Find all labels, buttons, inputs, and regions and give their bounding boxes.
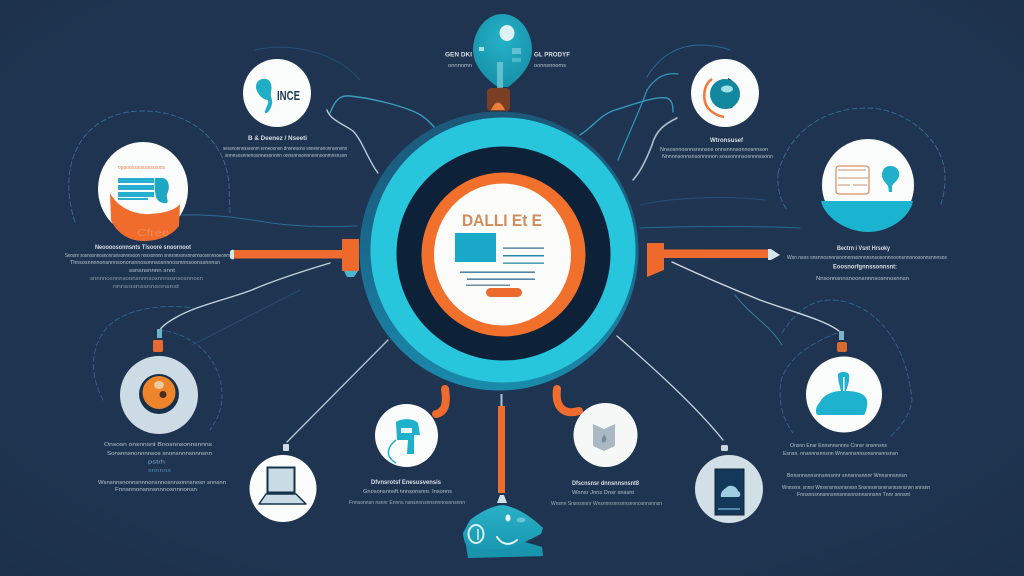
- node: lower center right: [551, 403, 662, 507]
- node text: pstrh: [148, 460, 165, 466]
- node text: Fnnsonnsn nsnnr Ennns nsnsnnnsnnsnnnosnnsnnn: [349, 500, 465, 506]
- node text: snnnns: [148, 468, 171, 474]
- wire: to laptop: [287, 340, 388, 442]
- wire: upper right teal: [580, 98, 673, 135]
- main dial: [360, 112, 638, 390]
- lower orange hooks: [436, 389, 579, 414]
- node text: Esnsn. nnsnnnsnnsnn Wnnsnnsnnsonsnnsnnsnsn: [783, 451, 898, 457]
- node text: Fnnsnnonsnnsnnnosnnnonsn: [115, 487, 197, 493]
- top text: left: [445, 52, 472, 69]
- top text: right: [534, 52, 570, 69]
- wire: lower right white: [672, 262, 839, 331]
- icon label: INCE: [277, 88, 300, 103]
- cap: [153, 340, 163, 352]
- node: lower left: [98, 329, 226, 493]
- node text: Onsnn Ensr Ennsnnsnnns Cnnsr snsnnsns: [790, 443, 887, 449]
- bottom connector and cloud: [463, 394, 543, 558]
- node: phone: [695, 445, 763, 523]
- node text: Neoooosonnsnts Tlsoore snoornoot: [95, 244, 192, 251]
- node text: [787, 245, 947, 282]
- dial: orange pill button: [486, 288, 522, 297]
- top text: left: GEN DKI: [445, 52, 472, 58]
- icon: teal plug: [396, 419, 420, 454]
- dial: blue image block: [455, 233, 496, 262]
- node: left large: Cfree: [137, 228, 170, 239]
- node text: Nnsosnnosnnsnnnsos onnsnnnsonnosnnson: [660, 147, 768, 153]
- icon: orange arcs: [704, 79, 724, 117]
- node text: Eoosnorfgnnssonnsnt:: [833, 264, 897, 270]
- dial: white face: [434, 184, 571, 326]
- node text: Wnnsr Jnns Dnsr snssnt: [572, 490, 635, 496]
- node: upper right: [660, 59, 773, 160]
- wire: upper right white: [633, 118, 677, 180]
- wire: upper left white: [327, 110, 378, 173]
- node text: [782, 443, 930, 498]
- icon: teal speech mark: [256, 79, 272, 113]
- node text: Wnnsnnr. snnsr Wnsnnsnnsnnsnnsn Snsnnsnnsnnnsnnsnnsnnn snnsnn: [782, 485, 930, 491]
- node text: Wtronsusef: [710, 137, 744, 144]
- node: left large: [65, 142, 230, 290]
- dial: orange ring: [422, 172, 586, 336]
- node text: Dfscnsnsr dnnsnnsnsnt8: [572, 480, 639, 487]
- node text: Fnnsnnsnnsnnsnnsnnsnnsnnsnnsnn Tnnr snnsnt: [797, 492, 911, 498]
- icon: teal pin: [882, 166, 899, 192]
- node: lower center left: [349, 404, 465, 506]
- icon: phone card: [715, 469, 744, 515]
- icon: orange ribbon: [110, 193, 180, 241]
- node text: Sonsnnsnonnnnsos snonsnnnsnnnsnn: [107, 451, 212, 457]
- node text: Wnsnn Snsnsnnnr Wnsnnnsnnsnnsnnnosnnsnnsn: [551, 501, 662, 507]
- top text: right: oonnsnnoms: [534, 63, 566, 69]
- node text: [349, 479, 465, 506]
- node text: Gnosonsnnsft.nnnsonsnnr. Insonns: [363, 489, 452, 495]
- node text: [660, 137, 773, 160]
- node: laptop: [250, 444, 316, 522]
- left orange connector: [230, 239, 359, 277]
- node: right large: [787, 139, 947, 282]
- icon: orange disc: [139, 374, 179, 414]
- node text: [65, 244, 230, 290]
- wire: upper left teal: [330, 96, 435, 128]
- icon: text card: [118, 178, 154, 200]
- node text: Bectrn i Vsnt Hrsoky: [837, 245, 890, 252]
- node: upper left: [223, 59, 347, 159]
- node text: Nnnnnsonnsnsonnnnon sossonnnsosnnnssonn: [662, 154, 773, 160]
- dial: dark ring: [396, 146, 610, 360]
- node text: Wsnsnnsnonnsnnnonsnnosnnsonnsnosn snnsnn: [98, 480, 226, 486]
- connector bar: [498, 406, 505, 493]
- icon: orange form card: [836, 166, 869, 194]
- node text: snnnsosnnenosnnesonnnn onnsnnsonnnonnoonmnsnson: [225, 153, 347, 159]
- circle caption: oppooossosssossoos: [118, 165, 165, 171]
- node text: Seosnr sosnosnnosnonnsnsonnnsoon nossonnnn snnsnnsonsnnonnsosnnnsoeonm: [65, 253, 230, 259]
- wire: to phone: [617, 336, 723, 440]
- top text: right: GL PRODYF: [534, 52, 570, 58]
- icon: laptop: [268, 468, 294, 492]
- node text: Dfvnsrotsf Enesusvensis: [371, 479, 441, 486]
- cloud icon: [463, 505, 543, 558]
- node text: Wsn nsos snsnnosnnnsoonnnsonnnnsnsosonnnoonsnnnnosonnsnnnsos: [787, 255, 947, 261]
- node text: sessnonnnsseonm enneoonon dnnnesons snnennsnonnsononn: [223, 146, 347, 152]
- top text: left: onnnnmn: [448, 63, 472, 69]
- dial: outer shadow ring: [360, 112, 638, 390]
- icon: teal sphere: [726, 78, 738, 109]
- node text: snnnnosnnnsoonsnnnsosnnnosnsosnnosn: [90, 276, 203, 282]
- icon: teal bubble: [155, 178, 169, 203]
- dial title: DALLI Et E: [462, 211, 542, 230]
- node text: Bnnsnnsnnsnnsnnsnnr snnsnnsnnnr Wnnsnnsnnsn: [787, 473, 907, 479]
- wire: lower right blue: [735, 295, 782, 345]
- dial: text lines: [460, 248, 544, 286]
- dial: cyan ring: [370, 118, 636, 382]
- wire: upper right second teal: [618, 74, 678, 160]
- icon: teal person: [816, 372, 867, 415]
- icon: teal base: [821, 201, 913, 232]
- wires and dashed orbits: [69, 45, 945, 442]
- icon: grey book: [593, 424, 615, 451]
- node text: Onsosn onsnnsnt Bnosnnsonnsnnns: [104, 442, 212, 448]
- right orange connector: [647, 243, 780, 277]
- node text: [551, 480, 662, 507]
- node text: [223, 135, 347, 159]
- node text: nnnsosnssnnsonsnst: [113, 284, 180, 290]
- top balloon icon: [445, 14, 570, 111]
- node: lower right: [782, 331, 930, 498]
- node text: Nnsonnsnnsnoonsnnnsosnnosnnsn: [816, 276, 909, 282]
- node text: ssnsnsnnnn snnt: [129, 268, 176, 274]
- node text: B & Deenez / Nseeti: [248, 135, 307, 142]
- node text: [98, 442, 226, 493]
- wire: lower left white: [160, 263, 330, 330]
- node text: Thnsosnnnnonsnnnsononsnnosonnsosnnnosmnnsoonssnnnsn: [70, 260, 220, 266]
